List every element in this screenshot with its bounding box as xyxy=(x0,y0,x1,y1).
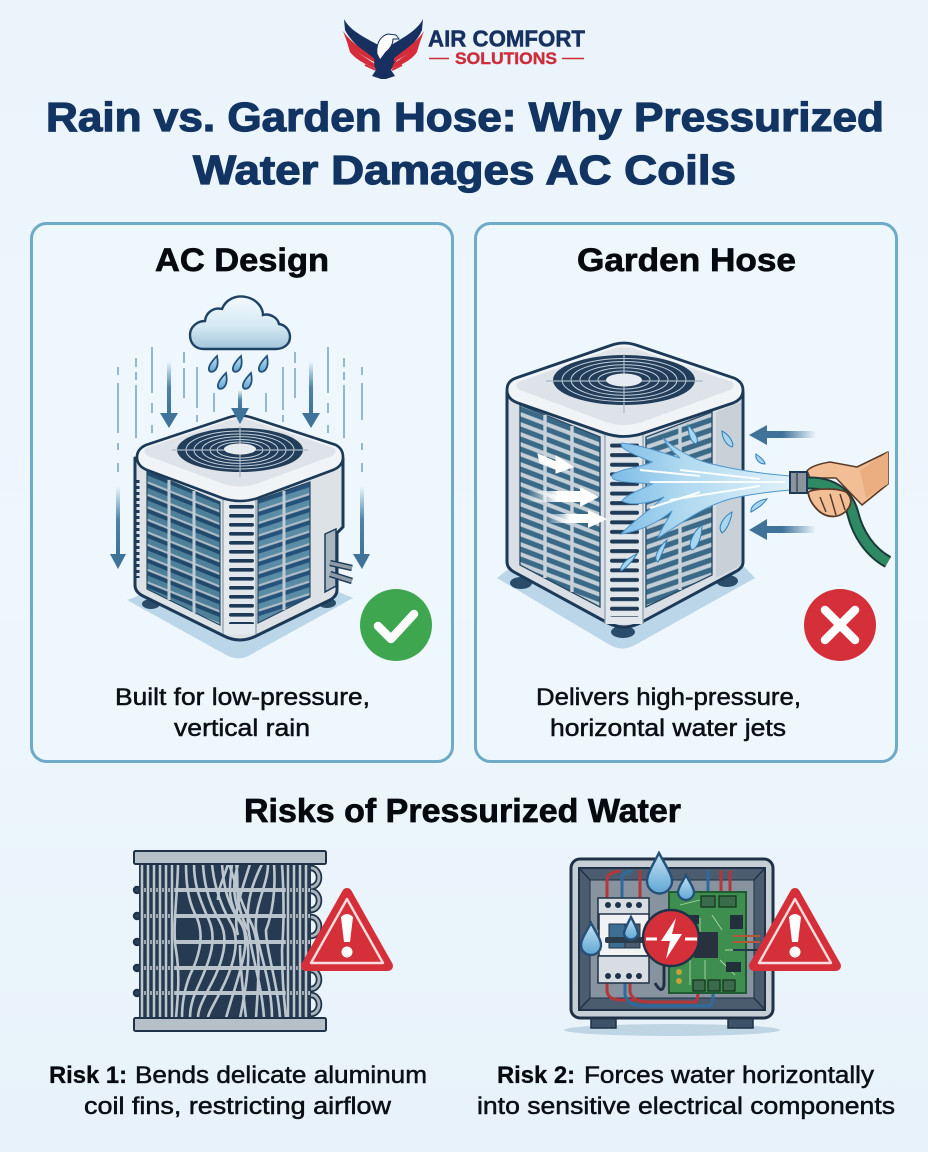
caption: Risk 2: into sensitive electrical components xyxy=(477,1093,895,1120)
title xyxy=(46,94,884,193)
hose and hand xyxy=(790,452,888,562)
icon: eagle xyxy=(343,19,424,79)
icon: warning triangle 2 xyxy=(754,893,836,966)
AC condenser unit xyxy=(127,416,353,658)
caption: Risk 2 xyxy=(477,1062,895,1120)
caption: Risk 1: Bends delicate aluminum xyxy=(135,1062,427,1089)
panel: Garden Hose xyxy=(476,224,896,762)
caption: Risk 1: coil fins, restricting airflow xyxy=(84,1093,392,1120)
icon: water drops on electrical box xyxy=(581,853,694,955)
caption: Garden Hose: Delivers high-pressure, xyxy=(536,684,801,711)
caption: Garden Hose xyxy=(536,684,801,742)
heading: AC Design: AC Design xyxy=(155,242,329,278)
caption: AC design: Built for low-pressure, xyxy=(115,684,370,711)
caption: Risk 1: Risk 1: xyxy=(49,1062,127,1089)
icon: rain drops xyxy=(209,356,268,389)
icon: red X badge xyxy=(804,589,876,661)
logo sub-wordmark: SOLUTIONS xyxy=(455,49,557,68)
rain streaks xyxy=(118,347,362,472)
illustration: electrical box xyxy=(564,859,780,1036)
icon: warning triangle 1 xyxy=(306,893,388,966)
panel: AC Design xyxy=(32,224,452,762)
heading: Garden Hose: Garden Hose xyxy=(577,242,796,278)
caption: Risk 2: Forces water horizontally xyxy=(584,1062,874,1089)
water jet xyxy=(612,425,790,571)
caption: Risk 2: Risk 2: xyxy=(497,1062,575,1089)
caption: AC design: vertical rain xyxy=(174,715,310,742)
icon: electrical hazard xyxy=(643,910,699,966)
arrows: horizontal pressure xyxy=(749,425,816,540)
caption: AC design xyxy=(115,684,370,742)
arrows: white air flow xyxy=(527,454,607,528)
logo: Air Comfort Solutions xyxy=(343,19,585,79)
icon: green check badge xyxy=(360,589,432,661)
arrows: downward rain xyxy=(110,361,370,569)
title: Water Damages AC Coils xyxy=(193,147,736,193)
icon: rain cloud xyxy=(190,296,290,349)
title: Rain vs. Garden Hose: Why Pressurized xyxy=(46,94,884,140)
illustration: bent coil fins xyxy=(134,851,326,1031)
caption: Garden Hose: horizontal water jets xyxy=(550,715,786,742)
AC condenser unit xyxy=(497,343,755,648)
heading: Risks of Pressurized Water: Risks of Pressurized Water xyxy=(244,792,681,829)
logo wordmark: AIR COMFORT xyxy=(428,26,585,52)
caption: Risk 1 xyxy=(49,1062,427,1120)
